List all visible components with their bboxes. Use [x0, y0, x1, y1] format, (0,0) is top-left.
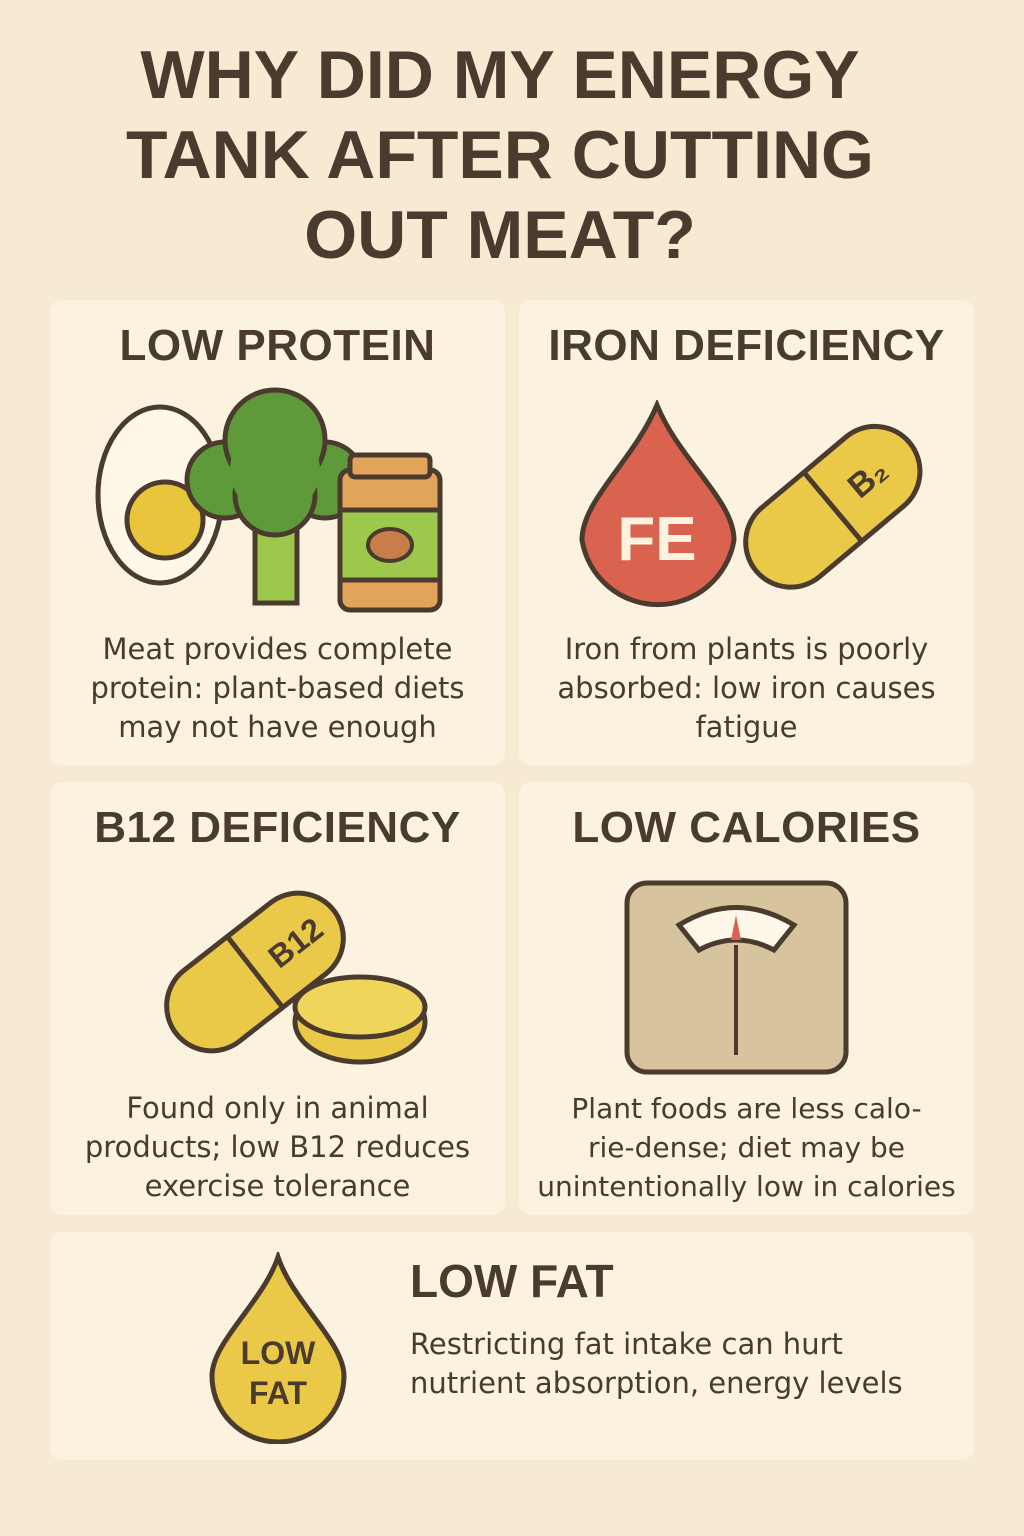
heading: b12: B12 DEFICIENCY [94, 803, 461, 852]
text: iron [557, 632, 936, 744]
icon: fat drop: LOW [241, 1335, 316, 1371]
text: calories: rie-dense; diet may be [588, 1131, 905, 1164]
text: b12 [85, 1091, 470, 1203]
text: low protein [90, 632, 465, 744]
title: OUT MEAT? [304, 197, 696, 273]
icon: drop and pill: B₂ [841, 451, 895, 506]
icon: fat drop: FAT [249, 1375, 307, 1411]
title: TANK AFTER CUTTING [126, 117, 874, 193]
text: calories [537, 1092, 956, 1203]
text: low protein: Meat provides complete [103, 632, 452, 666]
icon: b12 pills [164, 890, 428, 1064]
icon: fat drop [210, 1252, 346, 1444]
panel: low protein [50, 300, 505, 765]
panel: iron deficiency [519, 300, 974, 765]
text: b12: exercise tolerance [145, 1169, 410, 1203]
icon: drop and pill: FE [617, 505, 697, 574]
heading: calories: LOW CALORIES [572, 803, 921, 852]
title: WHY DID MY ENERGY [140, 37, 860, 113]
text: iron: Iron from plants is poorly [565, 632, 928, 666]
icon: drop and pill [580, 400, 922, 608]
icon: scale [624, 880, 848, 1074]
icon: egg broccoli jar [96, 388, 442, 612]
heading: iron: IRON DEFICIENCY [548, 321, 945, 370]
text: iron: fatigue [695, 710, 798, 744]
title [126, 37, 874, 273]
panel: b12 [50, 782, 505, 1215]
text: iron: absorbed: low iron causes [557, 671, 936, 705]
panel: low fat [50, 1232, 974, 1460]
text: b12: products; low B12 reduces [85, 1130, 470, 1164]
text: low fat: nutrient absorption, energy levels [410, 1366, 903, 1400]
icon: b12 pills: B12 [261, 911, 330, 975]
heading: low fat: LOW FAT [410, 1255, 614, 1307]
heading: low protein: LOW PROTEIN [120, 321, 435, 370]
text: low protein: may not have enough [118, 710, 437, 744]
text: calories: unintentionally low in calories [537, 1170, 956, 1203]
text: low fat [410, 1327, 903, 1400]
text: low fat: Restricting fat intake can hurt [410, 1327, 843, 1361]
text: b12: Found only in animal [126, 1091, 429, 1125]
panel: low calories [519, 782, 974, 1215]
text: calories: Plant foods are less calo- [571, 1092, 922, 1125]
text: low protein: protein: plant-based diets [90, 671, 465, 705]
